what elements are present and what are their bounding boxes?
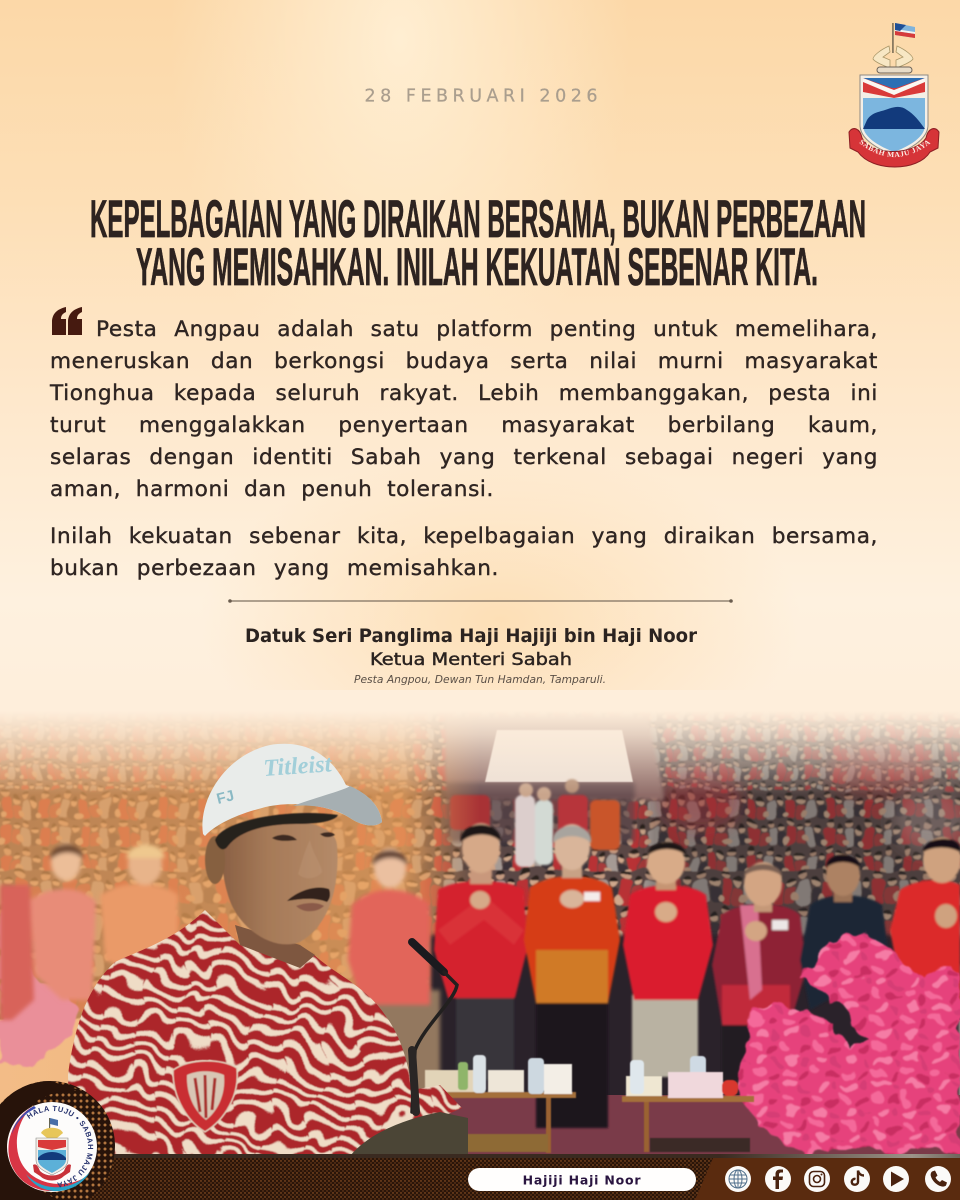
stage backdrop	[430, 935, 960, 1100]
hair	[215, 813, 338, 849]
flag	[892, 23, 915, 53]
name pill	[468, 1168, 696, 1191]
shield	[860, 75, 928, 155]
attribution: Ketua Menteri Sabah	[370, 650, 572, 670]
main figure: Chief Minister	[68, 744, 468, 1154]
date: 28 FEBRUARI 2026	[364, 86, 598, 106]
guest pink dress left	[0, 843, 96, 1020]
footer texture	[0, 1158, 960, 1200]
icon: website	[725, 1166, 751, 1192]
icon: instagram	[804, 1166, 830, 1192]
warm tint over left crowd	[0, 700, 960, 1160]
photo: audience and guests	[0, 690, 960, 1160]
head	[205, 813, 338, 944]
badge emblem	[33, 1118, 71, 1180]
table left	[425, 1055, 576, 1153]
badge ring text: HALA TUJU • SABAH MAJU JAYA	[26, 1106, 94, 1188]
headline	[90, 190, 866, 297]
attribution: Pesta Angpou, Dewan Tun Hamdan, Tamparuli.	[354, 673, 606, 686]
badge dark left	[0, 1081, 80, 1200]
icon: Sabah coat of arms	[848, 23, 940, 168]
icon: tiktok	[844, 1166, 870, 1192]
crest band	[877, 67, 912, 73]
guest 1 red shirt	[434, 823, 527, 1080]
footer top line	[0, 1154, 960, 1158]
quote text: meneruskan dan berkongsi budaya serta nilai murni masyarakat	[50, 349, 878, 374]
hall back wall	[445, 715, 665, 842]
badge dotted ring	[0, 1081, 115, 1200]
guest 4 maroon shirt	[712, 862, 806, 1080]
paragraph one	[50, 317, 878, 502]
nose	[298, 840, 322, 878]
guest 6 red shirt	[890, 837, 960, 1010]
tables	[425, 1055, 754, 1153]
quote text: turut menggalakkan penyertaan masyarakat berbilang kaum,	[50, 413, 878, 438]
guest 2 orange batik shirt	[524, 824, 620, 1128]
quote text	[50, 317, 878, 581]
guest red-pink woman	[348, 848, 430, 1005]
podium	[350, 1112, 468, 1156]
floor	[425, 1095, 960, 1157]
quote text: Tionghua kepada seluruh rakyat. Lebih membanggakan, pesta ini	[50, 381, 878, 406]
motto scroll: SABAH MAJU JAYA	[860, 140, 930, 158]
badge: Hala Tuju Sabah Maju Jaya	[0, 1081, 115, 1200]
cap logo: Titleist	[263, 751, 334, 782]
footer bar	[0, 1154, 960, 1200]
quote text: Pesta Angpau adalah satu platform penting untuk memelihara,	[96, 317, 878, 342]
guest 3 red shirt khaki trousers	[623, 842, 713, 1077]
microphone	[412, 942, 457, 1112]
moustache	[287, 887, 330, 902]
quote text: bukan perbezaan yang memisahkan.	[50, 556, 499, 581]
name pill: Hajiji Haji Noor	[523, 1172, 641, 1188]
top fade of photo	[0, 690, 960, 795]
icon: phone	[925, 1166, 951, 1192]
icon: youtube play	[883, 1166, 909, 1192]
audience crowd	[0, 708, 960, 1020]
faded left flowers	[0, 905, 76, 1065]
white cap	[202, 744, 382, 836]
quote text: Inilah kekuatan sebenar kita, kepelbagaian yang diraikan bersama,	[50, 524, 878, 549]
white cap: FJ	[215, 787, 236, 808]
chest emblem	[173, 1061, 237, 1132]
ear	[205, 836, 225, 884]
guests standing in front	[434, 823, 960, 1128]
divider	[228, 599, 733, 603]
attribution: Datuk Seri Panglima Haji Hajiji bin Haji Noor	[245, 625, 698, 647]
badge swoosh	[8, 1107, 84, 1191]
quote text: aman, harmoni dan penuh toleransi.	[50, 477, 494, 502]
quote text: selaras dengan identiti Sabah yang terkenal sebagai negeri yang	[50, 445, 878, 470]
guest 5 navy shirt	[800, 854, 890, 1010]
social panel	[695, 1158, 960, 1200]
stage screen	[485, 730, 633, 782]
badge disc	[7, 1102, 97, 1192]
attribution	[245, 625, 698, 686]
patterned shirt	[68, 910, 462, 1154]
neck	[235, 925, 315, 968]
eyes	[272, 832, 335, 841]
icon: facebook	[765, 1166, 791, 1192]
lips	[296, 903, 324, 911]
back-row guests	[450, 779, 620, 867]
motto scroll	[848, 128, 940, 168]
paragraph two	[50, 524, 878, 581]
pink blossoms right	[737, 931, 960, 1154]
guest orange left	[100, 844, 178, 990]
crest arms	[873, 46, 913, 68]
crowd colour patches	[650, 730, 960, 950]
icon: quotation mark	[52, 307, 82, 335]
table right	[622, 1056, 754, 1152]
